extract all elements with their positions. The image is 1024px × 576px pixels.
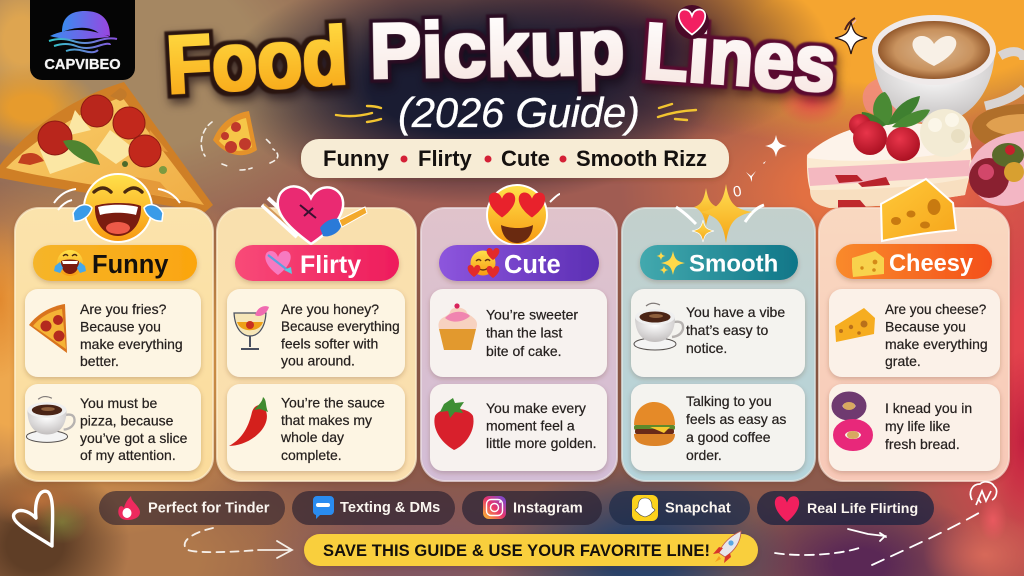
- title: Food Pickup Lines: Pickup: [369, 3, 625, 95]
- icon: small pizza with dashed orbit: [201, 111, 278, 170]
- title: Food Pickup Lines: [164, 3, 839, 111]
- chip: Real Life Flirting: Real Life Flirting: [807, 501, 918, 517]
- card: honey line: feels softer with: [281, 336, 378, 352]
- card: sauce line: that makes my: [281, 412, 372, 428]
- card: sweeter line: [430, 289, 607, 377]
- emoji: big sparkles: [676, 183, 764, 243]
- icon: donuts: [837, 397, 867, 445]
- chip: Snapchat: Snapchat: [665, 500, 731, 516]
- card: golden line: You make every: [486, 400, 586, 416]
- card: vibe line: notice.: [686, 340, 727, 356]
- card: golden line: [430, 384, 607, 471]
- chip: Perfect for Tinder: [99, 491, 285, 525]
- logo: CAPVIBEO: [30, 0, 135, 80]
- card: coffee order line: order.: [686, 447, 722, 463]
- card: cheese line: Are you cheese?: [885, 302, 986, 317]
- card: honey line: Because everything: [281, 319, 400, 334]
- panel: cheesy: [819, 179, 1009, 481]
- card: sweeter line: than the last: [486, 324, 562, 340]
- card: pizza line: [25, 384, 201, 471]
- icon: coffee: [634, 303, 683, 350]
- chip: Real Life Flirting: [757, 491, 934, 525]
- card: cheese line: [829, 289, 1000, 377]
- doodle: yellow speed lines right: [658, 104, 696, 120]
- emoji: heart eyes face: [486, 184, 560, 246]
- doodle: brain sketch: [970, 482, 997, 505]
- pill: Cheesy: Cheesy: [889, 251, 973, 277]
- icon: snapchat: [632, 495, 658, 521]
- sparkles and doodles mid right: [746, 135, 787, 182]
- panel: cute: [421, 184, 617, 481]
- chip: Texting & DMs: [292, 491, 455, 525]
- illustration: strawberry cake: [807, 92, 972, 208]
- emoji: big sparkles: 0: [732, 183, 743, 201]
- card: pizza line: of my attention.: [80, 447, 176, 463]
- chip: Perfect for Tinder: Perfect for Tinder: [148, 500, 270, 516]
- emoji: smiling hearts: [468, 248, 499, 278]
- card: pizza line: You must be: [80, 395, 158, 411]
- card: bread line: [829, 384, 1000, 471]
- card: fries line: Are you fries?: [80, 301, 167, 317]
- icon: sparkle near title: [835, 18, 867, 54]
- emoji: cheese wedge: [881, 179, 956, 241]
- card: sauce line: whole day: [280, 429, 344, 445]
- arrow: dashed right doodle: [775, 510, 984, 565]
- subtitle: 2026 Guide: (2026 Guide): [398, 89, 640, 136]
- card: golden line: little more golden.: [486, 435, 597, 451]
- icon: heart on title: [675, 5, 709, 39]
- emoji: laughing small: [54, 250, 86, 276]
- icon: burger: [634, 402, 675, 446]
- emoji: laughing face: [54, 173, 180, 243]
- icon: message bubble: [313, 496, 334, 519]
- doodle: yellow speed lines left: [336, 106, 381, 122]
- illustration: pastries and bowl: [968, 104, 1024, 206]
- card: coffee order line: a good coffee: [686, 429, 771, 445]
- card: honey line: you around.: [281, 352, 355, 368]
- subtitle pill: categories: [301, 139, 729, 178]
- card: honey line: Are you honey?: [281, 301, 379, 317]
- pill: Cheesy: [836, 244, 992, 279]
- card: cheese line: grate.: [885, 353, 921, 369]
- icon: cupcake: [439, 303, 477, 350]
- subtitle pill: categories: Funny: [323, 146, 390, 171]
- card: vibe line: that’s easy to: [686, 322, 768, 338]
- arrow: dashed left arrow to CTA: [185, 528, 292, 558]
- illustration: large pizza slice: [0, 82, 213, 212]
- icon: chili: [229, 397, 268, 446]
- card: vibe line: [631, 289, 805, 377]
- panel: flirty: [217, 186, 416, 481]
- pill: Cute: Cute: [504, 251, 561, 279]
- doodle: hand-drawn heart: [13, 491, 53, 546]
- card: coffee order line: Talking to you: [686, 393, 772, 409]
- pill: Funny: [33, 245, 197, 281]
- icon: cocktail: [234, 306, 269, 349]
- card: cheese line: Because you: [885, 318, 966, 334]
- card: bread line: fresh bread.: [885, 436, 960, 452]
- pill: Flirty: Flirty: [300, 251, 361, 279]
- pill: Smooth: [640, 245, 798, 280]
- chip: Instagram: [462, 491, 602, 525]
- card: golden line: moment feel a: [486, 418, 575, 434]
- card: cheese line: make everything: [885, 336, 988, 352]
- call to action: [304, 531, 758, 566]
- card: coffee order line: feels as easy as: [686, 411, 786, 427]
- card: fries line: Because you: [80, 318, 161, 334]
- logo: CAPVIBEO: CAPVIBEO: [44, 57, 121, 73]
- card: sweeter line: bite of cake.: [486, 343, 562, 359]
- emoji: cheese small: [852, 251, 884, 277]
- panel: funny: [15, 173, 213, 481]
- title: Food Pickup Lines: Lines: [641, 6, 839, 108]
- card: pizza line: pizza, because: [80, 412, 174, 428]
- icon: heart: [775, 496, 799, 522]
- icon: cheese: [835, 308, 875, 342]
- icon: instagram: [483, 496, 506, 519]
- pill: Cute: [439, 245, 599, 281]
- title: Food Pickup Lines: Food: [164, 11, 350, 111]
- emoji: sparkles small: [656, 251, 685, 275]
- card: pizza line: you’ve got a slice: [80, 430, 188, 446]
- emoji: heart small: [265, 251, 292, 275]
- emoji: heart with arrow: [262, 186, 367, 244]
- call to action: SAVE THIS GUIDE & USE YOUR FAVORITE LINE!: [323, 542, 710, 560]
- card: bread line: I knead you in: [885, 400, 972, 416]
- card: fries line: better.: [80, 353, 119, 369]
- icon: flame: [118, 496, 140, 520]
- card: honey line: [227, 289, 405, 377]
- subtitle pill: categories: Flirty: [418, 146, 473, 171]
- subtitle pill: categories: Smooth Rizz: [576, 146, 707, 171]
- card: vibe line: You have a vibe: [686, 304, 785, 320]
- subtitle pill: categories: Cute: [501, 146, 550, 171]
- icon: pizza slice: [29, 304, 67, 353]
- card: sauce line: [227, 384, 405, 471]
- pill: Flirty: [235, 245, 399, 281]
- card: bread line: my life like: [885, 418, 951, 434]
- icon: strawberry: [434, 398, 474, 450]
- chip: Texting & DMs: Texting & DMs: [340, 500, 440, 516]
- card: fries line: [25, 289, 201, 377]
- pill: Smooth: Smooth: [689, 250, 778, 278]
- card: sauce line: complete.: [281, 447, 342, 463]
- card: coffee order line: [631, 384, 805, 471]
- illustration: coffee cup with latte art: [863, 15, 1024, 124]
- icon: rocket: [713, 531, 741, 563]
- pill: Funny: Funny: [92, 251, 169, 279]
- chip: Instagram: Instagram: [513, 500, 583, 516]
- icon: coffee: [26, 397, 75, 442]
- card: sauce line: You’re the sauce: [281, 394, 385, 410]
- chip: Snapchat: [609, 491, 750, 525]
- card: sweeter line: You’re sweeter: [486, 306, 578, 322]
- card: fries line: make everything: [80, 336, 183, 352]
- panel: smooth: [622, 183, 815, 481]
